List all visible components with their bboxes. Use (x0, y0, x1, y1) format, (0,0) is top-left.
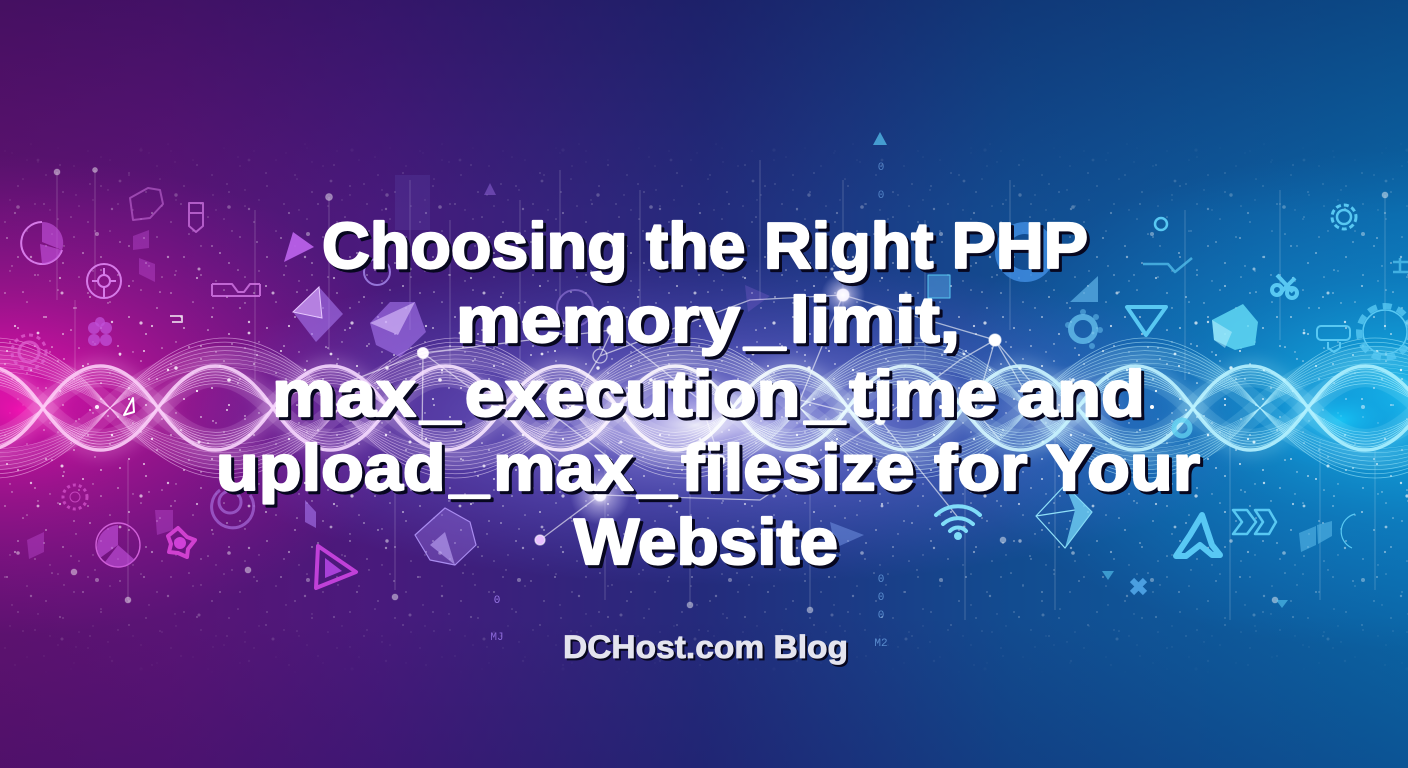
icon: pentagon gem (1212, 304, 1258, 350)
icon: triangle down small (1102, 571, 1114, 580)
icon: triangle small top (873, 132, 887, 145)
title line 3: max _execution _time and (272, 357, 1145, 430)
icon: concentric ring (212, 490, 254, 528)
icon: ring with knobs (1065, 309, 1103, 349)
decorative digit columns (490, 162, 888, 650)
wave mesh ribbon (0, 338, 1408, 478)
central glows (0, 273, 1408, 525)
icon: arrow gem (1036, 485, 1092, 548)
digits: centre-right column top 2: 0 (878, 190, 884, 202)
icon: faint circle (557, 290, 593, 326)
icon: blue ring (1001, 228, 1049, 276)
icon: figure (1176, 515, 1220, 556)
particle field (4, 148, 1408, 666)
icons: centre cluster (395, 132, 1049, 548)
icon: lower gem (415, 508, 476, 565)
icon: triangle on wave (124, 398, 134, 415)
icon: small glyph (170, 316, 182, 322)
digits: centre-left label: MJ (490, 632, 504, 644)
digits: centre-left column: 0 (494, 595, 500, 607)
icon: wifi (936, 506, 980, 540)
icon: pie chart bottom left (96, 523, 140, 567)
icon: squares (1299, 521, 1332, 552)
icon: triangle down small 2 (1276, 600, 1288, 608)
digits: centre-right column top: 0 (878, 162, 884, 174)
title line 5: Website (574, 505, 838, 578)
icon: chevrons (1233, 510, 1276, 534)
vertical data lines (54, 160, 1388, 620)
icon: dashed ring (63, 485, 87, 509)
title line 1: Choosing the Right PHP (322, 209, 1088, 282)
icon: pie chart top left (21, 222, 63, 264)
icon: faded panel (395, 175, 430, 230)
icon: gear ring (87, 264, 121, 298)
icon: big gear (1359, 306, 1408, 358)
icon: star (168, 528, 195, 557)
icons: left magenta cluster (12, 188, 476, 588)
icon: small ring (1155, 218, 1167, 230)
icon: line cross (1143, 258, 1192, 272)
icon: squares (27, 230, 173, 559)
icon: diamond gem (293, 287, 343, 342)
icon: router (1317, 326, 1350, 352)
subtitle: site name: DCHost.com Blog (563, 629, 848, 665)
icon: faint triangle (745, 285, 770, 312)
icon: bracket glyph (1393, 258, 1408, 272)
icon: ring on wave (1174, 420, 1190, 436)
digits: centre-right label: M2 (874, 638, 888, 650)
title line 4: upload _max_filesize for Your (216, 431, 1200, 504)
icon: faded triangle top (484, 183, 496, 195)
icon: play triangle (284, 232, 314, 262)
icon: pentagon gem (370, 302, 426, 357)
title line 2: memory _limit, (456, 283, 960, 356)
network lines and nodes (340, 289, 1055, 545)
icon: down triangle (1127, 307, 1166, 335)
icon: outlined triangle (316, 546, 356, 588)
icon: ribbon line (212, 284, 260, 296)
icons: right cyan cluster (936, 205, 1408, 608)
icon: ring gear (12, 335, 46, 369)
digits: centre-right column bottom 2: 0 (878, 592, 884, 604)
digits: centre-right column bottom: 0 (878, 574, 884, 586)
digits: centre-right column bottom 3: 0 (878, 610, 884, 622)
icon: pad lower (305, 500, 316, 528)
icon: crossed links (1272, 275, 1297, 298)
icon: gear top right (1332, 205, 1356, 229)
icon: x (1132, 580, 1145, 593)
icon: arc (1341, 514, 1355, 548)
icon: tag (189, 203, 203, 232)
icon: gear behind title (364, 259, 390, 285)
icon: bar wedge (1070, 276, 1098, 302)
icon: flower (88, 317, 112, 346)
icon: hexagon blob (130, 188, 163, 220)
title (216, 209, 1200, 578)
icon: faint lower play triangle (830, 522, 864, 548)
icon: grid panel (928, 275, 950, 298)
